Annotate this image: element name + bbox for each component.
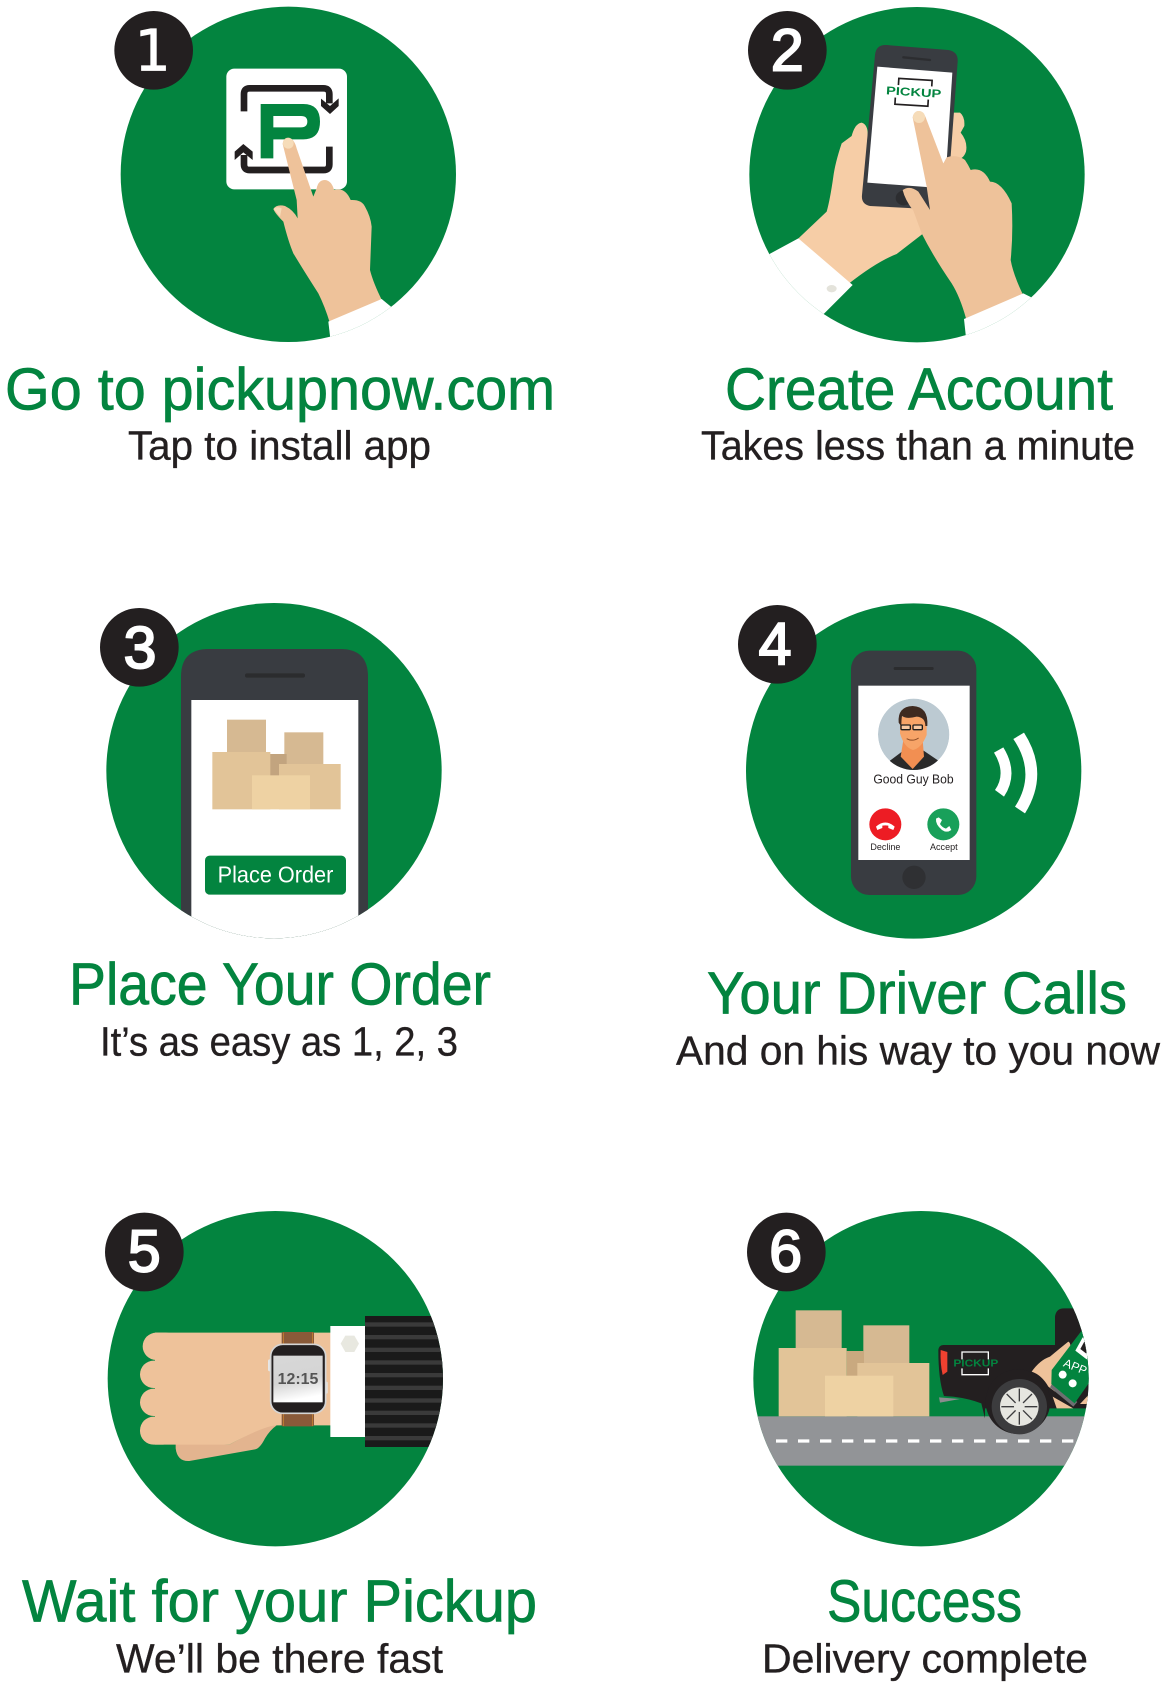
green circle: [753, 1211, 1089, 1546]
panel: step 5: [22, 1211, 537, 1682]
logo: PICKUP: PICKUP: [953, 1359, 999, 1370]
number badge 5: 5: [128, 1218, 161, 1284]
road: [740, 1416, 1107, 1466]
icon: boxes: [779, 1310, 929, 1416]
green circle: [108, 1211, 443, 1546]
number badge 6: 6: [769, 1218, 802, 1284]
button: accept: [927, 808, 959, 852]
icon: hand: [140, 1333, 331, 1461]
logo: PICKUP: [885, 78, 943, 107]
green circle: [746, 603, 1081, 939]
illustration: place order phone: [100, 603, 442, 967]
icon: boxes: [212, 720, 341, 809]
icon: app tile: [226, 69, 347, 189]
heading: Go to pickupnow.com: [5, 356, 555, 422]
icon: pickup truck: [938, 1308, 1093, 1434]
subheading: We’ll be there fast: [116, 1636, 444, 1682]
icon: holding hand: [760, 113, 966, 317]
green circle: [749, 7, 1085, 342]
heading: Wait for your Pickup: [22, 1568, 537, 1634]
subheading: Takes less than a minute: [701, 422, 1135, 468]
subheading: Delivery complete: [762, 1636, 1088, 1682]
illustration: delivery: [740, 1211, 1107, 1546]
number badge 3: [100, 608, 179, 687]
number badge 1: 1: [134, 18, 171, 85]
heading: Create Account: [725, 356, 1113, 422]
illustration: incoming call: [738, 603, 1081, 939]
heading: Place Your Order: [69, 952, 491, 1018]
number badge 1: [114, 11, 193, 90]
subheading: It’s as easy as 1, 2, 3: [100, 1018, 458, 1064]
number badge 4: [738, 605, 817, 684]
number badge 3: 3: [124, 615, 156, 681]
green circle: [121, 7, 456, 342]
icon: hand holding phone: [1032, 1330, 1089, 1408]
button: place order: [205, 856, 346, 895]
icon: phone: [862, 45, 958, 210]
icon: pointing hand: [273, 138, 395, 350]
avatar: driver: [878, 699, 949, 777]
number badge 5: [105, 1213, 184, 1291]
heading: Your Driver Calls: [707, 960, 1127, 1026]
icon: signal waves: [994, 733, 1037, 813]
button: place order: Place Order: [218, 862, 334, 888]
caller name: Good Guy Bob: [873, 772, 954, 787]
illustration: hands holding phone: [748, 7, 1085, 350]
number badge 2: 2: [771, 18, 804, 84]
number badge 6: [747, 1213, 826, 1291]
icon: watch: [268, 1332, 328, 1426]
icon: pointing hand: [903, 111, 1037, 350]
icon: watch: 12:15: [278, 1371, 318, 1388]
illustration: tap app icon: [114, 7, 456, 350]
subheading: And on his way to you now: [676, 1028, 1160, 1074]
button: decline: Decline: [870, 842, 900, 852]
logo: PICKUP: [953, 1352, 999, 1375]
subheading: Tap to install app: [128, 422, 431, 468]
panel: step 4: [676, 603, 1160, 1074]
green circle: [106, 603, 442, 938]
panel: step 3: [69, 603, 491, 1064]
icon: hand holding phone: APP: [1062, 1356, 1089, 1378]
logo: PICKUP: PICKUP: [886, 85, 942, 101]
icon: phone with call screen: [851, 651, 976, 895]
heading: Success: [827, 1568, 1022, 1634]
number badge 2: [748, 11, 827, 90]
illustration: wrist watch: [105, 1211, 447, 1546]
icon: phone with order screen: [181, 649, 368, 967]
panel: step 1: [5, 7, 555, 469]
button: decline: [869, 808, 901, 852]
number badge 4: 4: [759, 612, 791, 678]
panel: step 2: [701, 7, 1135, 468]
panel: step 6: [740, 1211, 1107, 1682]
button: accept: Accept: [930, 842, 958, 852]
icon: shirt cuff and sleeve: [330, 1316, 447, 1447]
